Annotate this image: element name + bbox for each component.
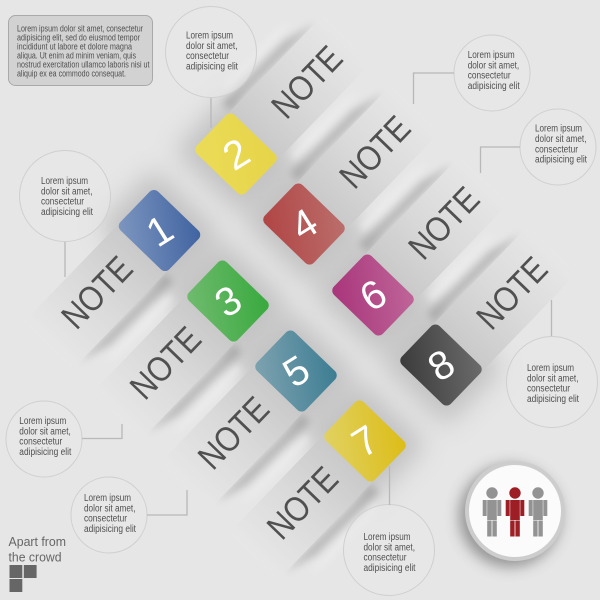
- note 7: 7: [344, 417, 387, 466]
- callout 6: dolor sit amet,: [535, 134, 586, 145]
- callout 7: adipisicing elit: [364, 563, 416, 574]
- callout 2: consectetur: [186, 51, 230, 62]
- callout 3: consectetur: [19, 437, 63, 448]
- callout 6: [480, 109, 596, 185]
- callout 7: Lorem ipsum: [364, 532, 410, 543]
- note 3: 3: [207, 277, 250, 326]
- note 3: [92, 258, 288, 456]
- callout 3: adipisicing elit: [19, 447, 71, 458]
- badge: apart from the crowd people: [459, 461, 565, 567]
- note 2: NOTE: [264, 39, 350, 126]
- icon: red person center: [506, 487, 524, 536]
- callout 2: Lorem ipsum: [186, 30, 233, 42]
- intro text box: adipisicing elit, sed do eiusmod tempor: [17, 32, 141, 44]
- note 4: [244, 69, 440, 267]
- callout 4: consectetur: [468, 71, 511, 82]
- callout 8: [506, 300, 598, 428]
- callout 1: Lorem ipsum: [41, 176, 88, 187]
- note 6: NOTE: [401, 180, 487, 267]
- note 7: [229, 398, 425, 596]
- note 7: NOTE: [260, 460, 346, 547]
- intro text box: [8, 16, 152, 86]
- callout 4: Lorem ipsum: [468, 50, 515, 61]
- intro text box: incididunt ut labore et dolore magna: [17, 42, 132, 52]
- callout 2: [166, 6, 256, 128]
- callout 7: [344, 466, 434, 596]
- icon: grey person right: [529, 487, 547, 536]
- note 4: NOTE: [332, 109, 418, 196]
- callout 5: adipisicing elit: [84, 524, 136, 535]
- callout 1: dolor sit amet,: [41, 186, 92, 197]
- note 6: 6: [352, 271, 395, 320]
- note 2: 2: [215, 130, 258, 179]
- note 8: [381, 210, 577, 408]
- callout 3: [6, 401, 122, 477]
- callout 7: dolor sit amet,: [364, 542, 415, 553]
- callout 7: consectetur: [364, 553, 407, 564]
- note 3: NOTE: [123, 320, 209, 407]
- intro text box: aliqua. Ut enim ad minim veniam, quis: [17, 50, 136, 62]
- callout 5: [71, 477, 187, 553]
- callout 5: dolor sit amet,: [84, 503, 136, 514]
- callout 5: consectetur: [84, 514, 128, 525]
- callout 1: consectetur: [41, 197, 85, 208]
- note 4: 4: [283, 200, 326, 249]
- callout 3: dolor sit amet,: [19, 426, 71, 437]
- callout 3: Lorem ipsum: [19, 416, 66, 427]
- note 5: NOTE: [191, 390, 277, 477]
- note 5: [160, 328, 356, 526]
- icon: three squares: [10, 565, 37, 592]
- callout 2: adipisicing elit: [186, 61, 238, 72]
- note 5: 5: [275, 347, 318, 396]
- callout 5: Lorem ipsum: [84, 493, 131, 504]
- note 6: [313, 140, 509, 338]
- note 2: [176, 0, 372, 197]
- note 1: 1: [139, 207, 181, 256]
- note 8: NOTE: [469, 250, 555, 337]
- note 1: NOTE: [54, 249, 140, 337]
- callout 6: adipisicing elit: [535, 155, 587, 166]
- intro text box: nostrud exercitation ullamco laboris nisi ut: [17, 60, 150, 70]
- callout 8: Lorem ipsum: [527, 363, 574, 374]
- caption: Apart from the crowd: [8, 534, 66, 564]
- callout 6: consectetur: [535, 144, 579, 155]
- caption: Apart from the crowd: Apart from: [8, 534, 66, 549]
- callout 4: dolor sit amet,: [468, 60, 519, 71]
- callout 2: dolor sit amet,: [186, 41, 238, 52]
- callout 8: adipisicing elit: [527, 394, 579, 405]
- icon: grey person left: [483, 487, 501, 536]
- callout 8: consectetur: [527, 384, 571, 395]
- caption: Apart from the crowd: the crowd: [8, 550, 62, 564]
- callout 4: adipisicing elit: [468, 81, 520, 92]
- callout 1: adipisicing elit: [41, 207, 93, 218]
- intro text box: aliquip ex ea commodo consequat.: [17, 68, 126, 80]
- central shadow halo: [99, 93, 502, 502]
- callout 4: [414, 35, 530, 111]
- callout 6: Lorem ipsum: [535, 124, 582, 135]
- callout 1: [20, 150, 110, 277]
- note 1: [24, 187, 220, 386]
- callout 8: dolor sit amet,: [527, 373, 578, 384]
- note 8: 8: [420, 341, 463, 390]
- intro text box: Lorem ipsum dolor sit amet, consectetur: [17, 24, 144, 34]
